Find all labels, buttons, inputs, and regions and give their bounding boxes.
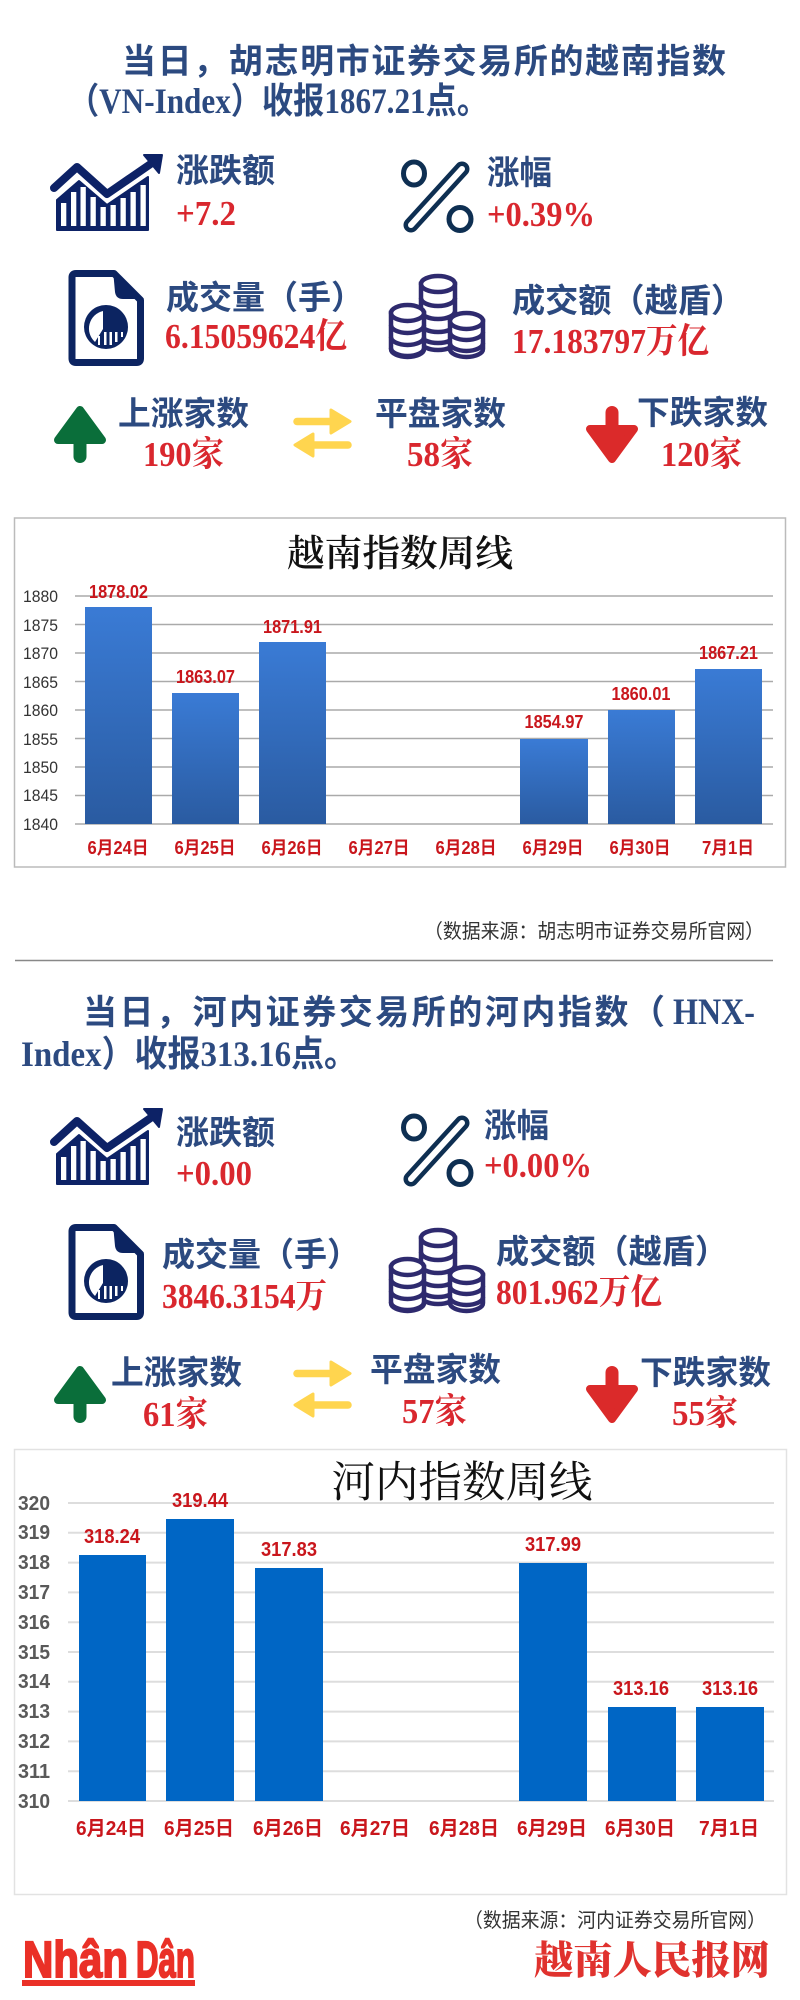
stat: change percent: +0.39%: [487, 195, 595, 234]
stat: decliners: 下跌家数: [637, 394, 768, 431]
stat: advancers: 上涨家数: [118, 395, 249, 432]
value labels: 1863.07: [176, 667, 235, 687]
stat: volume: 6.15059624亿: [165, 317, 347, 356]
chart: HNX-Index week: [14, 1450, 786, 1894]
stat: turnover: 17.183797万亿: [512, 322, 709, 361]
stat: change percent: 涨幅: [487, 154, 552, 191]
stat: decliners: 55家: [672, 1394, 738, 1433]
y axis labels: 1865: [23, 673, 58, 692]
y axis labels: 316: [18, 1612, 50, 1634]
stat: volume: 成交量（手）: [162, 1236, 360, 1273]
bars: [85, 607, 762, 824]
stat: change amount: +7.2: [176, 194, 236, 233]
y axis labels: 317: [18, 1582, 50, 1604]
stat: change amount: [176, 152, 275, 233]
heading: VN-Index summary: [68, 43, 726, 121]
y axis labels: 312: [18, 1731, 50, 1753]
x axis labels: 6月25日: [164, 1818, 234, 1840]
icon: rising chart: [54, 1109, 162, 1184]
value labels: 1867.21: [699, 643, 758, 663]
stat: volume: [162, 1236, 360, 1316]
stat: unchanged: [375, 395, 506, 474]
icon: percent: [404, 1116, 471, 1184]
stat: change percent: +0.00%: [484, 1146, 592, 1185]
stat: volume: 成交量（手）: [166, 279, 364, 316]
x axis labels: 6月24日: [88, 838, 148, 858]
y axis labels: [18, 1493, 51, 1813]
heading: VN-Index summary: 当日，胡志明市证券交易所的越南指数: [122, 43, 726, 81]
icon: document with pie chart: [72, 1224, 144, 1316]
icon: coin stacks: [391, 1230, 483, 1311]
chart title: 越南指数周线: [287, 533, 513, 575]
x axis labels: 6月26日: [253, 1818, 323, 1840]
logo: Chinese site name: 越南人民报网: [534, 1940, 770, 1983]
value labels: 1878.02: [89, 582, 148, 602]
heading: HNX-Index summary: HNX-: [673, 992, 755, 1033]
y axis labels: 1860: [23, 701, 58, 720]
heading: HNX-Index summary: Index）收报313.16点。: [21, 1034, 357, 1074]
y axis labels: 320: [18, 1493, 50, 1515]
value labels: 317.83: [261, 1539, 317, 1561]
stat: unchanged: 57家: [402, 1392, 467, 1431]
heading: VN-Index summary: （VN-Index）收报1867.21点。: [68, 81, 488, 121]
value labels: 319.44: [172, 1490, 229, 1512]
chart title: 河内指数周线: [332, 1460, 592, 1507]
bars: [79, 1519, 764, 1801]
x axis labels: 6月28日: [429, 1818, 499, 1840]
y axis labels: 311: [18, 1761, 50, 1783]
stat: turnover: 801.962万亿: [496, 1273, 662, 1312]
icon: up arrow: [58, 1370, 102, 1416]
stat: change percent: 涨幅: [484, 1107, 549, 1144]
stat: advancers: [118, 395, 249, 474]
x axis labels: 6月29日: [517, 1818, 587, 1840]
chart: VN-Index week: [14, 518, 786, 867]
stat: advancers: 61家: [143, 1395, 208, 1434]
x axis labels: 6月30日: [610, 838, 670, 858]
y axis labels: 1870: [23, 644, 58, 663]
stat: advancers: 上涨家数: [111, 1354, 242, 1391]
panel: HNX-Index stats: [54, 1107, 771, 1434]
stat: decliners: [637, 394, 768, 474]
y axis labels: 1880: [23, 587, 58, 606]
x axis labels: [76, 1818, 759, 1840]
x axis labels: 6月30日: [605, 1818, 675, 1840]
stat: change percent: [484, 1107, 592, 1185]
stat: change amount: [176, 1114, 275, 1193]
y axis labels: 1840: [23, 815, 58, 834]
stat: change amount: 涨跌额: [176, 152, 275, 189]
heading: HNX-Index summary: 当日，河内证券交易所的河内指数（: [83, 994, 665, 1032]
stat: change amount: 涨跌额: [176, 1114, 275, 1151]
icon: unchanged arrows: [295, 1362, 350, 1416]
stat: decliners: 120家: [661, 435, 742, 474]
stat: decliners: 下跌家数: [640, 1354, 771, 1391]
x axis labels: 6月24日: [76, 1818, 146, 1840]
y axis labels: 310: [18, 1791, 50, 1813]
y axis labels: 1845: [23, 786, 58, 805]
panel: VN-Index stats: [54, 152, 768, 474]
stat: unchanged: 平盘家数: [370, 1351, 501, 1388]
x axis labels: 6月26日: [262, 838, 322, 858]
icon: down arrow: [590, 1372, 634, 1419]
logo: Nhan Dan: Nhân: [23, 1931, 128, 1988]
source note: HNX-Index: （数据来源：河内证券交易所官网）: [464, 1909, 766, 1932]
value labels: [84, 1490, 758, 1700]
stat: unchanged: 平盘家数: [375, 395, 506, 432]
source note: VN-Index: （数据来源：胡志明市证券交易所官网）: [424, 920, 764, 943]
value labels: [89, 582, 758, 732]
stat: change percent: [487, 154, 595, 234]
stat: advancers: 190家: [143, 435, 224, 474]
logo: Nhan Dan: Dân: [136, 1931, 195, 1988]
x axis labels: 6月29日: [522, 838, 584, 858]
stat: turnover: [496, 1233, 728, 1312]
icon: up arrow: [58, 410, 102, 456]
y axis labels: 1875: [23, 616, 58, 635]
icon: percent: [404, 162, 471, 230]
stat: turnover: [512, 282, 744, 361]
x axis labels: 7月1日: [702, 838, 754, 858]
value labels: 1860.01: [612, 684, 670, 704]
stat: turnover: 成交额（越盾）: [496, 1233, 728, 1270]
y axis labels: 314: [18, 1671, 51, 1693]
stat: advancers: [111, 1354, 242, 1434]
y axis labels: 315: [18, 1642, 50, 1664]
heading: HNX-Index summary: [21, 992, 755, 1074]
y axis labels: 1850: [23, 758, 58, 777]
y axis labels: [23, 587, 58, 834]
icon: unchanged arrows: [295, 410, 350, 456]
stat: turnover: 成交额（越盾）: [512, 282, 744, 319]
y axis labels: 319: [18, 1522, 50, 1544]
x axis labels: 6月27日: [340, 1818, 410, 1840]
stat: unchanged: [370, 1351, 501, 1431]
x axis labels: 6月25日: [174, 838, 236, 858]
x axis labels: 7月1日: [699, 1818, 759, 1840]
value labels: 313.16: [702, 1678, 758, 1700]
stat: volume: 3846.3154万: [162, 1277, 327, 1316]
value labels: 317.99: [525, 1534, 581, 1556]
x axis labels: 6月28日: [436, 838, 496, 858]
icon: rising chart: [54, 155, 162, 230]
y axis labels: 318: [18, 1552, 50, 1574]
stat: volume: [165, 279, 364, 356]
stat: unchanged: 58家: [407, 435, 473, 474]
y axis labels: 313: [18, 1701, 50, 1723]
value labels: 318.24: [84, 1526, 141, 1548]
x axis labels: [88, 838, 754, 858]
x axis labels: 6月27日: [348, 838, 410, 858]
stat: decliners: [640, 1354, 771, 1433]
icon: down arrow: [590, 412, 634, 459]
value labels: 1854.97: [524, 712, 584, 732]
icon: coin stacks: [391, 276, 483, 357]
value labels: 313.16: [613, 1678, 669, 1700]
y axis labels: 1855: [23, 730, 58, 749]
value labels: 1871.91: [263, 617, 322, 637]
icon: document with pie chart: [72, 270, 144, 362]
stat: change amount: +0.00: [176, 1154, 252, 1193]
